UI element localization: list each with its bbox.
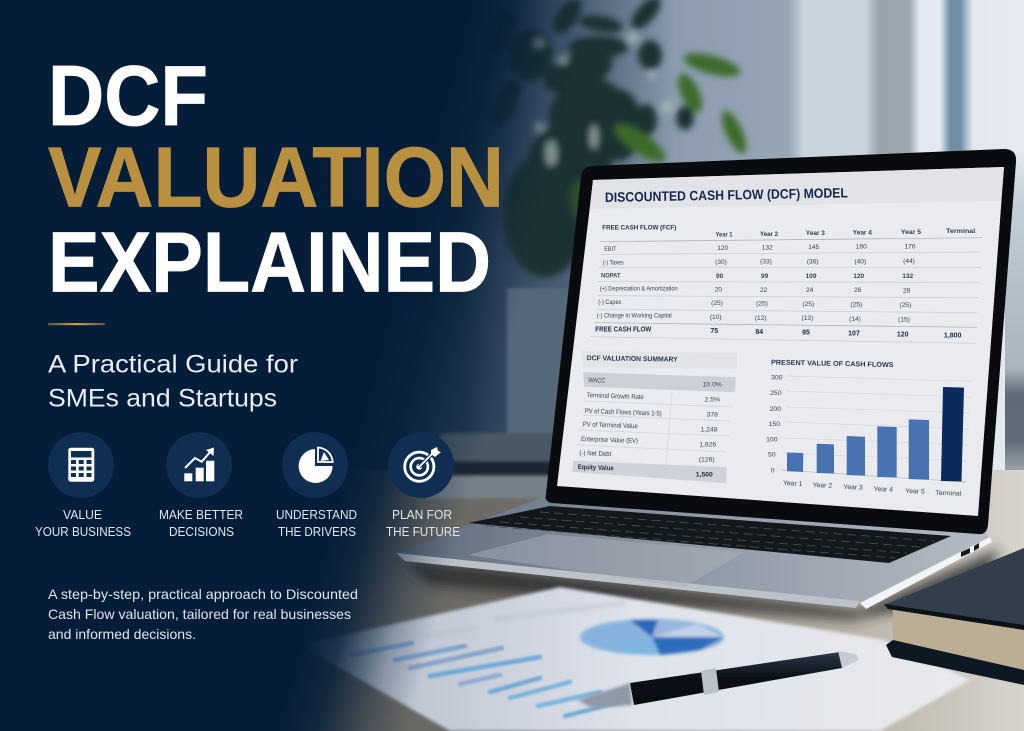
table: free cash flow: Terminal <box>946 228 975 235</box>
icon: target with arrow <box>388 432 454 498</box>
table: free cash flow: (13) <box>801 315 813 322</box>
label <box>276 508 357 539</box>
table: DCF valuation summary: 1,500 <box>696 471 713 478</box>
bar chart: present value of cash flows: 300 <box>771 374 783 382</box>
icon: pie chart <box>282 432 348 498</box>
subtitle: SMEs and Startups <box>48 385 277 413</box>
bar chart: present value of cash flows: 150 <box>769 421 780 428</box>
table: free cash flow: (25) <box>711 300 723 307</box>
benefit: make better decisions <box>159 432 243 539</box>
label: MAKE BETTER <box>159 508 243 522</box>
background: desk surface <box>0 470 1024 731</box>
table: DCF valuation summary: 1,248 <box>700 426 718 433</box>
title line: DCF: DCF <box>48 49 208 144</box>
icon: calculator <box>48 432 114 498</box>
description paragraph: A step-by-step, practical approach to Discounted <box>48 586 358 602</box>
laptop lid bezel <box>546 149 1016 534</box>
table: free cash flow: (10) <box>710 314 722 321</box>
label <box>159 508 243 539</box>
label <box>386 508 460 539</box>
background: blurred pot and tray <box>430 288 571 498</box>
table: DCF valuation summary: Equity Value <box>578 464 614 472</box>
table: free cash flow: 95 <box>802 330 810 336</box>
table: free cash flow: (44) <box>903 258 915 265</box>
table: free cash flow: 120 <box>853 273 865 280</box>
table: free cash flow: Year 4 <box>853 230 872 236</box>
label: DECISIONS <box>169 525 234 539</box>
table: DCF valuation summary: Enterprise Value (EV) <box>581 436 638 445</box>
description paragraph <box>48 586 358 642</box>
bar chart: present value of cash flows: Year 4 <box>874 486 893 494</box>
table: free cash flow: (33) <box>760 259 772 266</box>
label: YOUR BUSINESS <box>35 525 131 539</box>
table: free cash flow: 84 <box>755 329 763 336</box>
table: free cash flow: (-) Change in Working Capital <box>597 313 672 320</box>
pen <box>577 651 859 708</box>
table: free cash flow: (36) <box>807 259 819 266</box>
document on desk <box>300 587 970 731</box>
title line: EXPLAINED: EXPLAINED <box>48 216 491 311</box>
label <box>35 508 131 539</box>
table: free cash flow: (14) <box>849 316 861 323</box>
table: free cash flow: EBIT <box>604 246 616 253</box>
table: free cash flow: 28 <box>903 288 911 294</box>
bar chart: present value of cash flows: 250 <box>770 390 782 397</box>
table: DCF valuation summary: 10.0% <box>703 382 722 389</box>
table: free cash flow: 132 <box>762 244 773 251</box>
table: free cash flow: 99 <box>761 273 769 280</box>
bar chart: present value of cash flows: PRESENT VALUE OF CASH FLOWS <box>771 360 894 369</box>
table: DCF valuation summary: DCF VALUATION SUMMARY <box>587 355 678 364</box>
table: free cash flow: (-) Taxes <box>603 259 624 266</box>
subtitle <box>48 351 298 413</box>
laptop shadow on desk <box>400 548 1000 620</box>
table: free cash flow: 109 <box>805 273 817 280</box>
blurred bar lists on document <box>352 643 620 716</box>
table: free cash flow: (25) <box>802 301 814 308</box>
benefit: plan for the future <box>386 432 460 539</box>
table: DCF valuation summary: PV of Cash Flows (Years 1-5) <box>585 408 662 418</box>
table: DCF valuation summary: (-) Net Debt <box>579 450 612 458</box>
ports <box>961 543 979 557</box>
table: free cash flow: 120 <box>717 245 729 252</box>
table: DCF valuation summary: Terminal Growth Rate <box>587 392 644 401</box>
description paragraph: and informed decisions. <box>48 626 196 642</box>
table: free cash flow: 20 <box>715 286 722 294</box>
benefit: understand the drivers <box>276 432 357 539</box>
bar chart: present value of cash flows: Year 3 <box>843 484 863 492</box>
bar chart: present value of cash flows: 0 <box>771 468 775 475</box>
gold divider <box>48 323 105 325</box>
table: free cash flow: 90 <box>716 273 724 280</box>
plant: blurred leaves <box>481 0 751 277</box>
table: free cash flow: (25) <box>850 302 862 308</box>
table: free cash flow: Year 2 <box>760 231 778 238</box>
table: free cash flow: 75 <box>710 328 718 335</box>
table: DCF valuation summary: 2.5% <box>705 397 720 404</box>
bar chart: present value of cash flows: 100 <box>766 437 778 444</box>
table: DCF valuation summary: 1,626 <box>699 441 716 448</box>
bar chart: present value of cash flows: Year 1 <box>783 480 803 488</box>
bar chart: present value of cash flows <box>766 360 972 498</box>
table: free cash flow: (25) <box>756 300 768 308</box>
subtitle: A Practical Guide for <box>48 351 298 379</box>
trackpad <box>468 534 745 587</box>
table: free cash flow: (15) <box>898 316 910 324</box>
table: DCF valuation summary: (126) <box>699 456 715 463</box>
label: THE FUTURE <box>386 525 460 539</box>
table: DCF valuation summary <box>572 351 737 483</box>
table: free cash flow: 145 <box>808 244 820 251</box>
table: free cash flow: Year 1 <box>716 232 733 238</box>
label: VALUE <box>63 508 102 522</box>
screen title bar <box>590 167 1004 209</box>
bar chart: present value of cash flows: Terminal <box>935 490 962 498</box>
bar chart: present value of cash flows: Year 2 <box>813 482 832 490</box>
description paragraph: Cash Flow valuation, tailored for real businesses <box>48 606 351 622</box>
icon: rising bar chart <box>166 432 232 498</box>
table: free cash flow: 120 <box>897 332 909 338</box>
table: free cash flow: NOPAT <box>601 272 621 280</box>
blurred table on document <box>425 603 625 636</box>
table: free cash flow: 160 <box>856 244 867 251</box>
table: free cash flow: 22 <box>760 287 768 294</box>
screen title: DISCOUNTED CASH FLOW (DCF) MODEL <box>605 185 848 205</box>
label: PLAN FOR <box>392 508 452 522</box>
table: free cash flow: (40) <box>854 258 866 265</box>
table: free cash flow: 24 <box>806 287 814 294</box>
title line: VALUATION: VALUATION <box>48 131 504 226</box>
bar chart: present value of cash flows: 50 <box>768 452 776 459</box>
title <box>48 49 504 311</box>
table: free cash flow: Year 5 <box>901 229 921 236</box>
table: DCF valuation summary: WACC <box>588 377 606 385</box>
pie chart on document <box>580 619 724 655</box>
table: free cash flow: (25) <box>899 302 911 309</box>
table: free cash flow: (30) <box>715 259 727 266</box>
table: free cash flow: Year 3 <box>806 230 825 237</box>
table: free cash flow: (12) <box>755 315 767 322</box>
table: DCF valuation summary: 378 <box>707 411 718 418</box>
table: free cash flow: 176 <box>904 243 916 250</box>
table: DCF valuation summary: PV of Terminal Value <box>583 421 638 430</box>
laptop screen <box>557 167 1004 516</box>
book <box>884 548 1024 685</box>
label: THE DRIVERS <box>278 525 356 539</box>
table: free cash flow: 26 <box>854 287 862 294</box>
table: free cash flow: 132 <box>902 273 914 280</box>
label: UNDERSTAND <box>276 508 357 522</box>
table: free cash flow <box>590 224 983 343</box>
keyboard <box>468 506 951 563</box>
background photo: office window and wall <box>0 0 1024 480</box>
benefit: value your business <box>35 432 131 539</box>
table: free cash flow: FREE CASH FLOW <box>595 326 652 333</box>
bar chart: present value of cash flows: 200 <box>770 406 781 413</box>
table: free cash flow: 107 <box>848 330 860 338</box>
table: free cash flow: FREE CASH FLOW (FCF) <box>602 224 676 232</box>
table: free cash flow: (+) Depreciation & Amortization <box>600 286 678 293</box>
table: free cash flow: 1,800 <box>944 332 962 340</box>
bar chart: present value of cash flows: Year 5 <box>905 488 925 496</box>
laptop base deck <box>396 496 992 609</box>
table: free cash flow: (-) Capex <box>598 299 622 306</box>
